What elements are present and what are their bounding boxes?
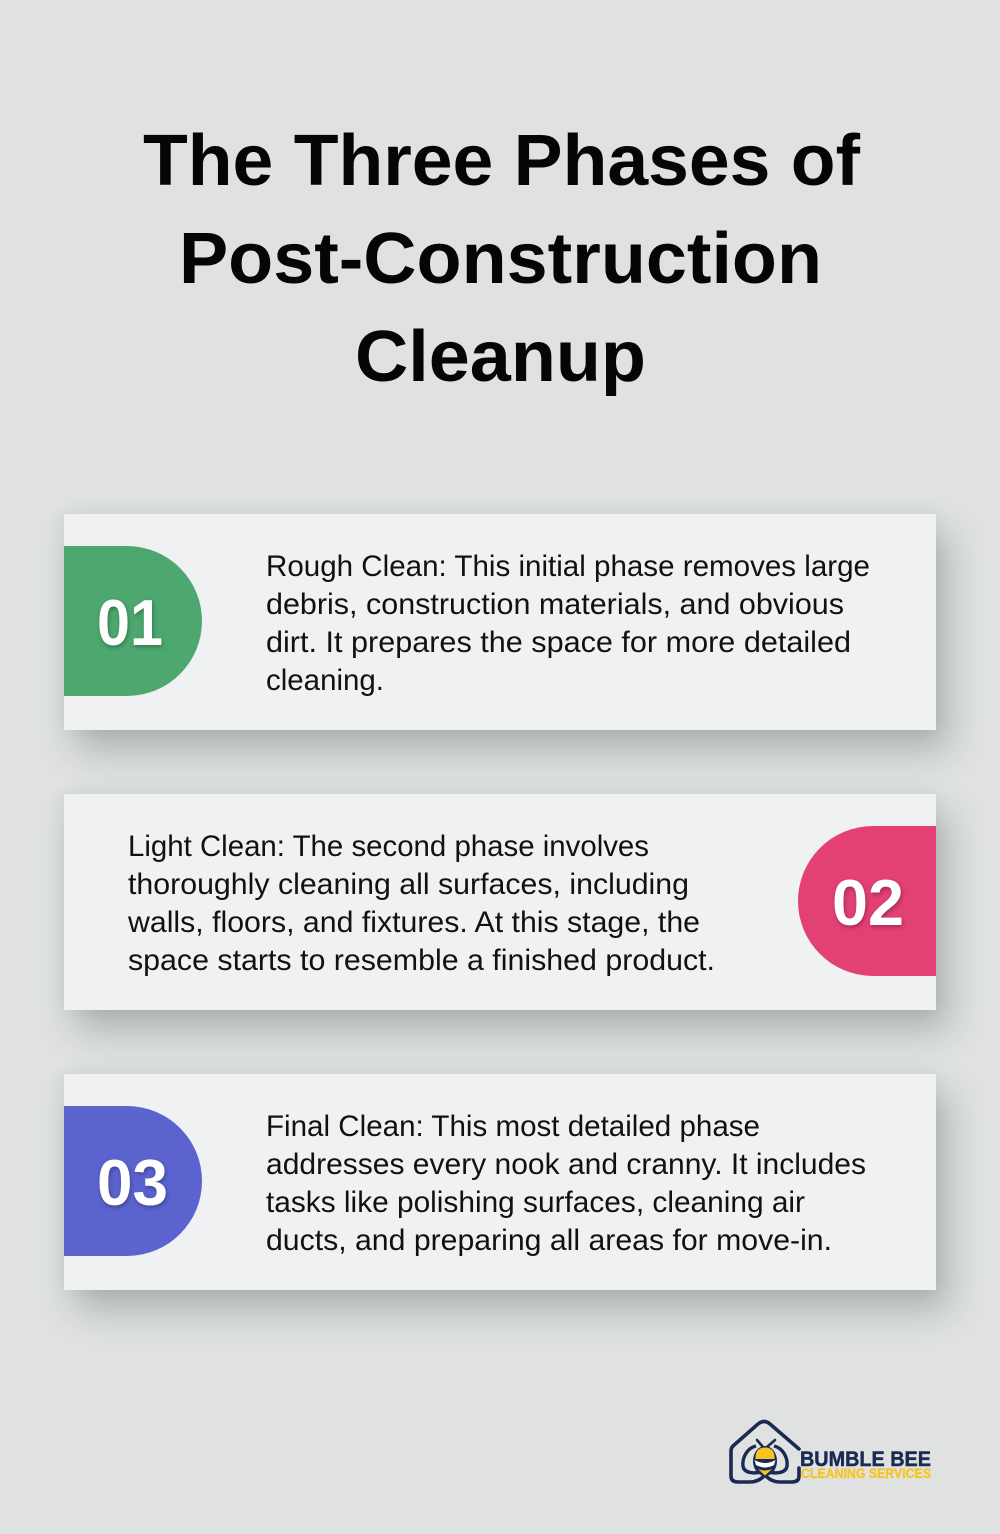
text: light clean description: space starts to resemble a finished product. bbox=[128, 944, 715, 977]
text: rough clean description: cleaning. bbox=[266, 664, 384, 697]
text: final clean description bbox=[266, 1110, 866, 1257]
badge: 02 bbox=[798, 826, 936, 976]
badge: 02: 02 bbox=[832, 866, 904, 939]
badge: 01: 01 bbox=[97, 586, 163, 659]
title: Cleanup bbox=[355, 317, 646, 397]
icon: house outline with bee bbox=[731, 1422, 799, 1482]
text: light clean description: walls, floors, and fixtures. At this stage, the bbox=[127, 906, 700, 939]
title bbox=[143, 121, 861, 397]
title: Post-Construction bbox=[179, 219, 822, 299]
text: rough clean description: debris, construction materials, and obvious bbox=[266, 588, 844, 621]
wordmark: Cleaning Services: CLEANING SERVICES bbox=[801, 1465, 931, 1481]
text: rough clean description bbox=[266, 550, 870, 697]
title: The Three Phases of bbox=[143, 121, 861, 201]
text: final clean description: Final Clean: This most detailed phase bbox=[266, 1110, 760, 1143]
badge: 03: 03 bbox=[97, 1146, 168, 1219]
badge: 03 bbox=[64, 1106, 202, 1256]
panel: phase 03 final clean bbox=[64, 1074, 936, 1290]
text: final clean description: addresses every nook and cranny. It includes bbox=[266, 1148, 866, 1181]
text: final clean description: tasks like polishing surfaces, cleaning air bbox=[266, 1186, 805, 1219]
text: rough clean description: Rough Clean: This initial phase removes large bbox=[266, 550, 870, 583]
text: light clean description: thoroughly cleaning all surfaces, including bbox=[128, 868, 689, 901]
badge: 01 bbox=[64, 546, 202, 696]
text: rough clean description: dirt. It prepares the space for more detailed bbox=[266, 626, 851, 659]
panel: phase 01 rough clean bbox=[64, 514, 936, 730]
text: light clean description: Light Clean: The second phase involves bbox=[128, 830, 649, 863]
text: final clean description: ducts, and preparing all areas for move-in. bbox=[266, 1224, 832, 1257]
logo: Bumble Bee Cleaning Services bbox=[729, 1420, 931, 1484]
text: light clean description bbox=[127, 830, 715, 977]
wordmark: Bumble Bee: BUMBLE BEE bbox=[800, 1447, 931, 1471]
panel: phase 02 light clean bbox=[64, 794, 936, 1010]
